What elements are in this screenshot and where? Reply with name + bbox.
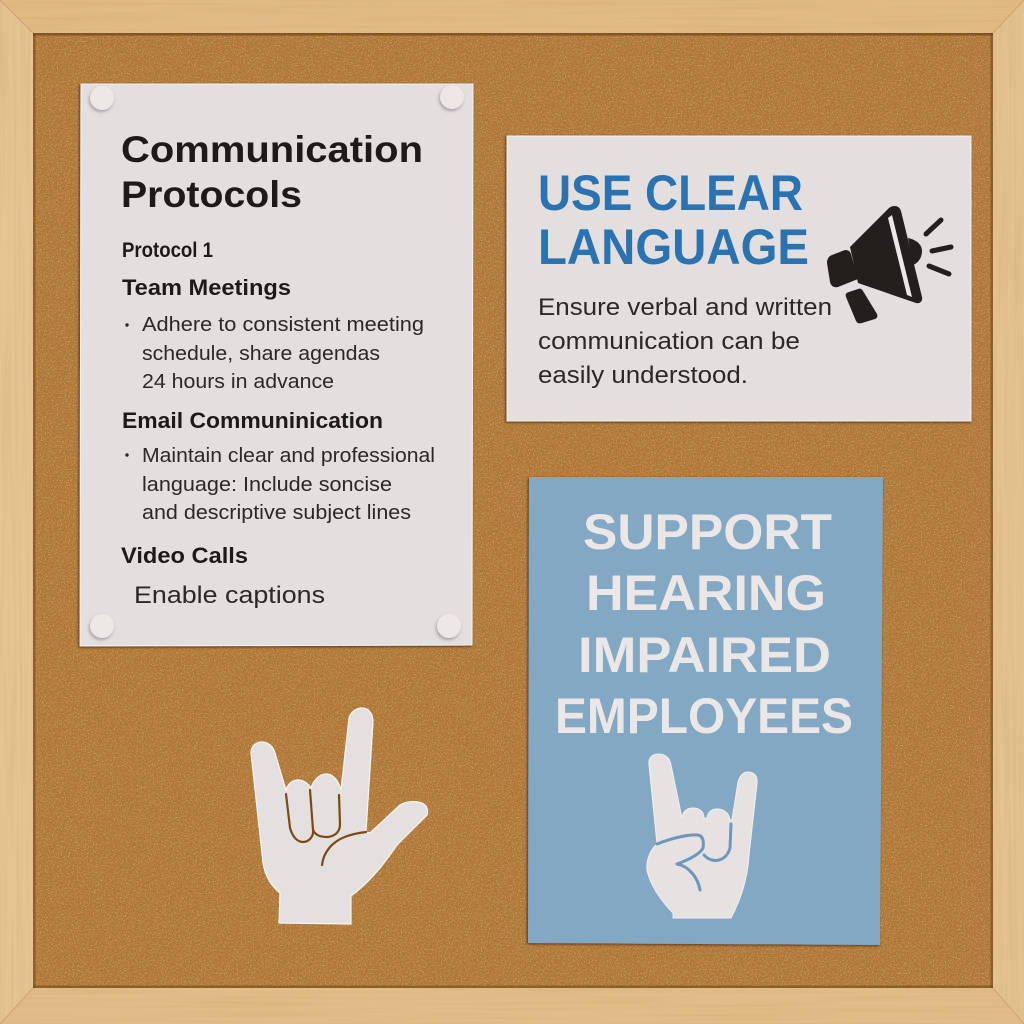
heading: support hearing impaired employees: EMPLOYEES: [555, 688, 853, 744]
text block: clear language description: Ensure verbal and written: [538, 294, 832, 321]
pin: top left: [90, 86, 114, 110]
heading: communication protocols: Protocols: [121, 174, 302, 215]
text block: team meetings bullet: [125, 314, 424, 393]
text: enable captions: Enable captions: [134, 582, 325, 609]
icon: sign language hand on poster: [647, 754, 757, 918]
subheading: team meetings: Team Meetings: [122, 275, 291, 300]
heading: use clear language: LANGUAGE: [538, 219, 809, 275]
subheading: video calls: Video Calls: [121, 543, 248, 568]
panel: use clear language: [507, 136, 971, 421]
text block: team meetings bullet: schedule, share agendas: [142, 343, 380, 365]
subheading: email communication: Email Communinication: [122, 408, 383, 433]
panel: support hearing impaired employees: [528, 477, 883, 945]
pin: top right: [440, 85, 464, 109]
heading: communication protocols: [121, 129, 423, 215]
icon: megaphone: [827, 206, 951, 323]
text block: email bullet: and descriptive subject lines: [142, 502, 411, 524]
heading: support hearing impaired employees: SUPPORT: [583, 504, 832, 560]
heading: support hearing impaired employees: HEARING: [586, 565, 826, 621]
panel: communication protocols: [80, 84, 473, 646]
text block: email bullet: [125, 445, 435, 524]
heading: communication protocols: Communication: [121, 129, 423, 170]
text block: email bullet: language: Include soncise: [142, 474, 392, 496]
text block: clear language description: easily understood.: [538, 362, 748, 389]
icon: sign language hand cutout on cork: [251, 708, 428, 924]
text block: team meetings bullet: 24 hours in advance: [142, 371, 334, 393]
heading: support hearing impaired employees: [555, 504, 853, 744]
heading: use clear language: USE CLEAR: [538, 165, 803, 221]
text block: clear language description: [538, 294, 832, 389]
subheading: protocol 1: Protocol 1: [122, 239, 213, 262]
heading: use clear language: [538, 165, 809, 275]
text block: email bullet: Maintain clear and professional: [142, 445, 435, 467]
heading: support hearing impaired employees: IMPAIRED: [578, 627, 831, 683]
pin: bottom right: [437, 614, 461, 638]
pin: bottom left: [90, 614, 114, 638]
text block: team meetings bullet: Adhere to consistent meeting: [142, 314, 424, 336]
text block: clear language description: communication can be: [538, 328, 800, 355]
